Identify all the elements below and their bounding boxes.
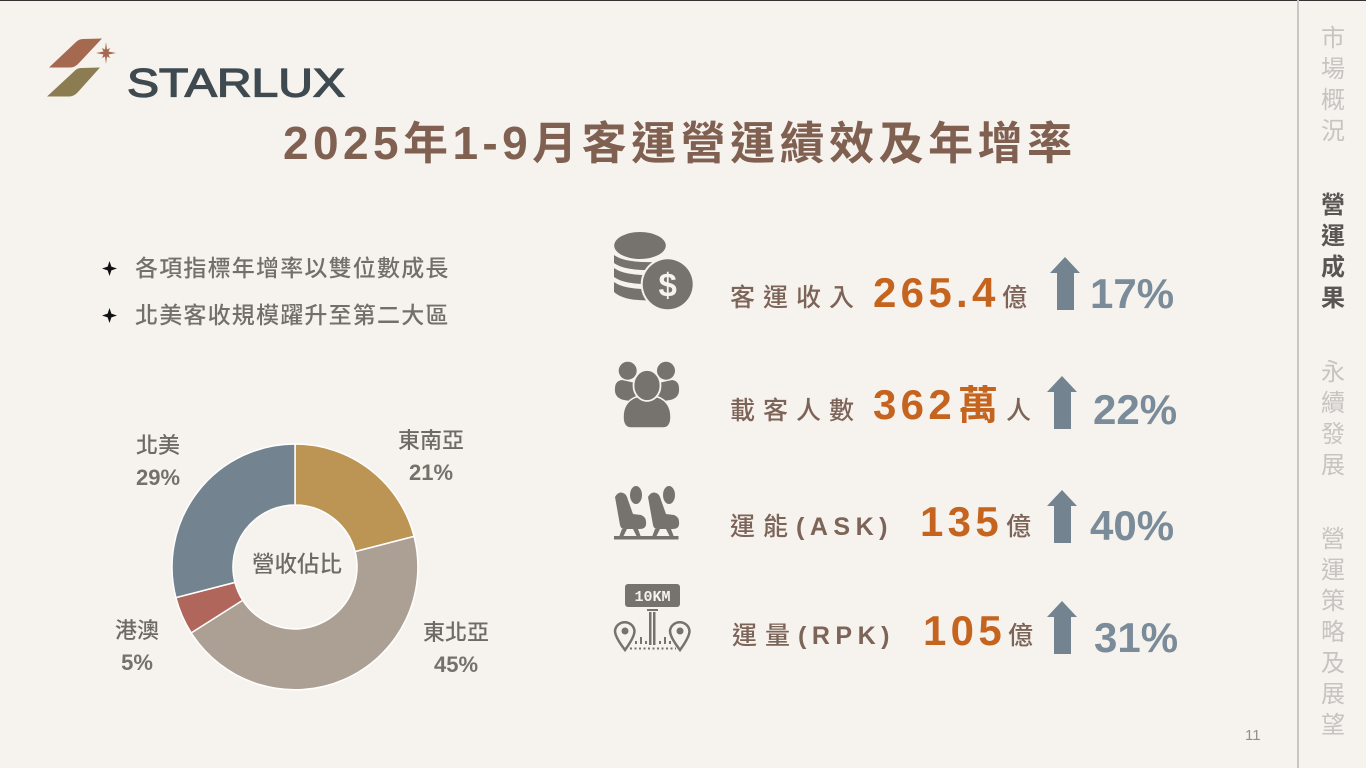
bullet text 1: 各項指標年增率以雙位數成長 [135, 255, 450, 281]
arrow: traffic up [1047, 601, 1077, 654]
arrow: capacity up [1047, 490, 1077, 543]
icon: bullet star 2 [102, 308, 117, 323]
metric label: 客運收入 [730, 284, 862, 312]
growth rate: 31% [1094, 614, 1178, 661]
metric value: 362萬 [873, 381, 998, 428]
nav: operating results: 成 [1321, 254, 1345, 281]
label: Northeast Asia: 45% [434, 652, 478, 677]
bullet text 2: 北美客收規模躍升至第二大區 [135, 302, 450, 328]
icon: star [96, 42, 116, 64]
nav: strategy and outlook: 營 [1321, 526, 1345, 553]
title: 2025年1-9月客運營運績效及年增率 [283, 117, 1077, 169]
growth rate: 22% [1093, 386, 1177, 433]
nav: strategy and outlook: 略 [1321, 619, 1345, 646]
icon: coins with dollar [614, 232, 693, 310]
nav: sustainability: 展 [1321, 452, 1345, 479]
nav: strategy and outlook: 展 [1321, 681, 1345, 708]
nav: market overview: 場 [1321, 56, 1345, 83]
metric: passenger revenue [730, 269, 1174, 317]
label: Southeast Asia [398, 428, 464, 485]
icon: group of people [614, 362, 680, 428]
donut centre label: 營收佔比 [252, 552, 342, 577]
metric label: 載客人數 [730, 397, 862, 425]
metric unit: 億 [1006, 513, 1031, 541]
nav: strategy and outlook: 策 [1321, 588, 1345, 615]
nav: market overview [1321, 25, 1345, 145]
metric label: 運能(ASK) [730, 513, 893, 541]
label: Northeast Asia: 東北亞 [423, 620, 489, 645]
nav: operating results: 運 [1321, 223, 1345, 250]
label: Hong Kong Macau [115, 618, 159, 675]
growth rate: 40% [1090, 502, 1174, 549]
label: Southeast Asia: 21% [409, 460, 453, 485]
metric value: 265.4 [873, 269, 1000, 316]
metric label: 運量(RPK) [732, 622, 895, 650]
label: North America [136, 433, 180, 490]
segment: Hong Kong Macau 5% [176, 582, 243, 633]
arrow: revenue up [1050, 257, 1080, 310]
nav: market overview: 況 [1321, 118, 1345, 145]
nav: sustainability: 發 [1321, 421, 1345, 448]
segment: Southeast Asia 21% [295, 444, 414, 552]
metric: passengers carried [730, 381, 1177, 433]
icon: aircraft seats [614, 486, 680, 540]
logo wordmark: STARLUX [127, 62, 345, 105]
metric unit: 人 [1006, 397, 1031, 425]
icon: upper brown wing [49, 38, 102, 68]
arrow: passengers up [1047, 376, 1077, 429]
nav: strategy and outlook: 運 [1321, 557, 1345, 584]
nav: sustainability [1321, 359, 1345, 479]
icon: coins with dollar: $ [659, 266, 677, 304]
nav: market overview: 概 [1321, 87, 1345, 114]
nav: strategy and outlook [1321, 526, 1345, 739]
icon: 10KM distance: 10KM [634, 589, 671, 606]
metric value: 105 [923, 607, 1006, 654]
icon: 10KM distance [614, 584, 691, 652]
nav: strategy and outlook: 望 [1321, 712, 1345, 739]
metric: traffic RPK [732, 607, 1178, 661]
donut chart: revenue share [172, 443, 418, 690]
top edge line [0, 0, 1366, 1]
metric value: 135 [920, 498, 1003, 545]
segment: Northeast Asia 45% [191, 536, 418, 690]
label: Hong Kong Macau: 5% [121, 650, 153, 675]
label: North America: 北美 [136, 433, 180, 458]
nav: sustainability: 續 [1321, 390, 1345, 417]
growth rate: 17% [1090, 270, 1174, 317]
metric unit: 億 [1008, 622, 1033, 650]
metric: capacity ASK [730, 498, 1174, 549]
segment: North America 29% [172, 444, 295, 598]
page number: 11 [1245, 727, 1261, 744]
icon: lower olive wing [47, 68, 100, 96]
label: Northeast Asia [423, 620, 489, 677]
sidebar navigation [1297, 0, 1366, 768]
nav: market overview: 市 [1321, 25, 1345, 52]
bullet list [102, 255, 450, 328]
label: Southeast Asia: 東南亞 [398, 428, 464, 453]
nav: operating results: 營 [1321, 192, 1345, 219]
logo: STARLUX [47, 38, 346, 105]
label: North America: 29% [136, 465, 180, 490]
nav: operating results: 果 [1321, 285, 1345, 312]
nav: operating results [1321, 192, 1345, 312]
nav: strategy and outlook: 及 [1321, 650, 1345, 677]
label: Hong Kong Macau: 港澳 [115, 618, 159, 643]
nav: sustainability: 永 [1321, 359, 1345, 386]
icon: bullet star 1 [102, 261, 117, 276]
metric unit: 億 [1002, 284, 1027, 312]
